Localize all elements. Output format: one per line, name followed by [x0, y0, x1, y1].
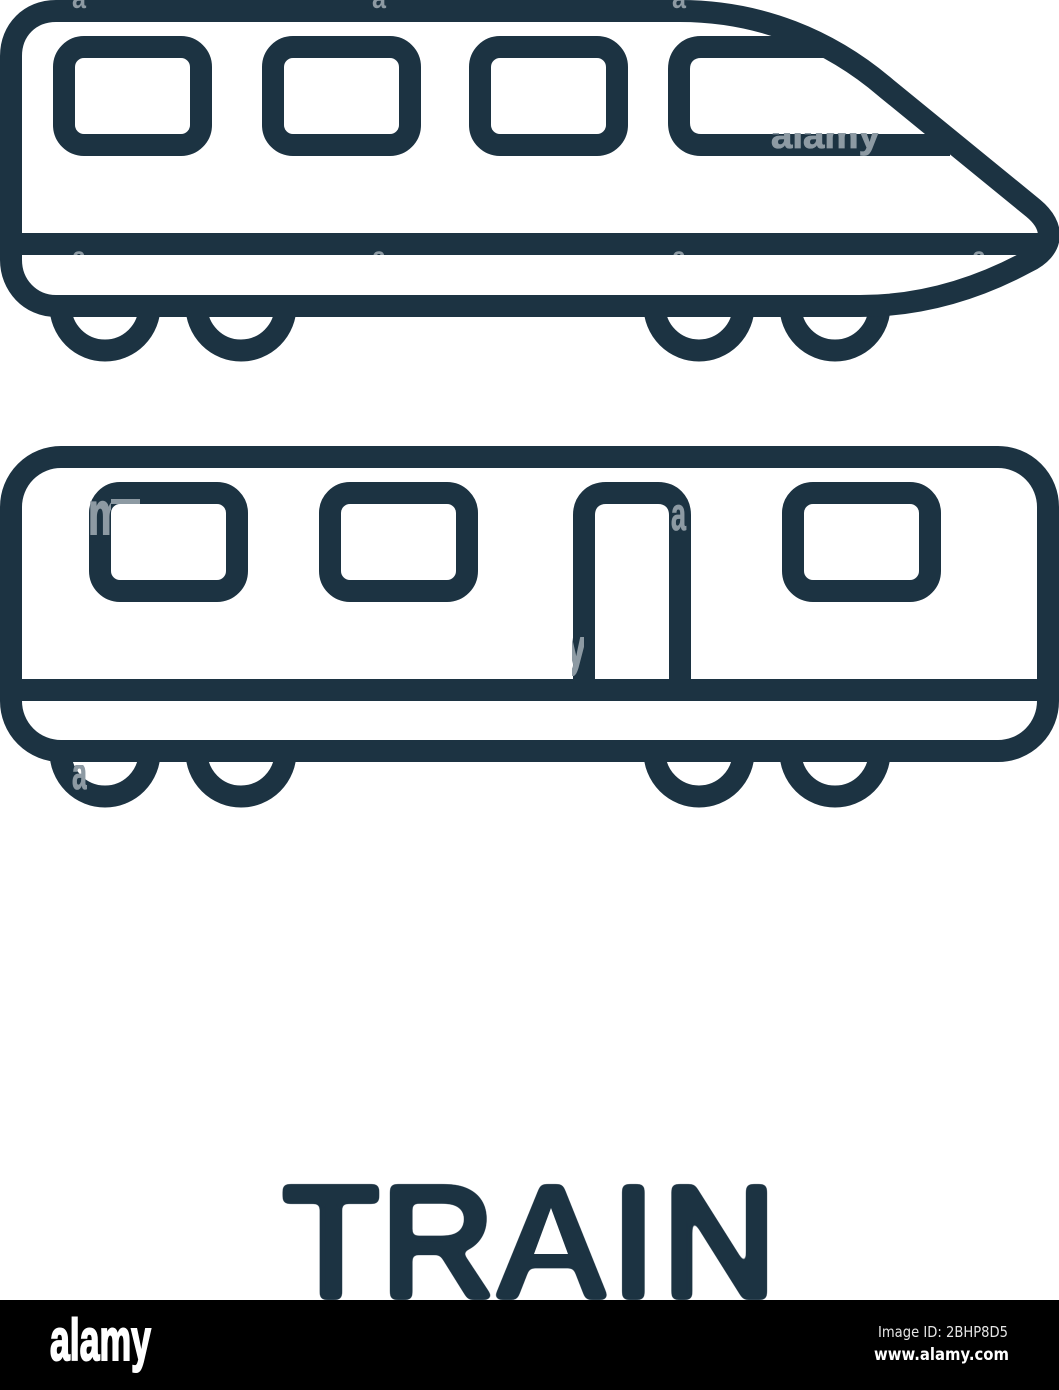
watermark fragments over the icons: y [566, 619, 586, 677]
watermark fragments over the icons: a [72, 241, 86, 274]
carriage body outline [11, 457, 1048, 751]
high-speed train body outline [11, 11, 1049, 306]
watermark fragments over the icons: alamy [771, 115, 880, 156]
window 3 [480, 47, 617, 145]
body stripe [11, 233, 1046, 255]
watermark fragments over the icons [72, 0, 986, 799]
watermark fragments over the icons: a [372, 241, 386, 274]
website: www.alamy.com [874, 1345, 1009, 1365]
watermark fragments over the icons: a [671, 488, 686, 540]
watermark fragments over the icons: m [88, 480, 124, 549]
image id: Image ID: 2BHP8D5 [878, 1323, 1008, 1341]
title: TRAIN [283, 1155, 776, 1330]
window 1 [64, 47, 201, 145]
watermark fragments over the icons: a [972, 241, 986, 274]
watermark fragments over the icons: a [672, 241, 686, 274]
footer bar [0, 1300, 1059, 1390]
carriage door [584, 493, 680, 690]
alamy logo: alamy [50, 1308, 151, 1373]
carriage stripe [11, 679, 1048, 701]
icon: passenger carriage [11, 457, 1048, 796]
watermark fragments over the icons: a [72, 747, 87, 799]
wheels of high-speed train [60, 306, 880, 350]
cab windshield [679, 47, 950, 145]
carriage window 3 [793, 493, 930, 591]
carriage window 1 [100, 493, 237, 591]
wheels of passenger carriage [60, 752, 880, 796]
window 2 [273, 47, 410, 145]
carriage window 2 [330, 493, 467, 591]
icon: high-speed train [11, 11, 1049, 350]
